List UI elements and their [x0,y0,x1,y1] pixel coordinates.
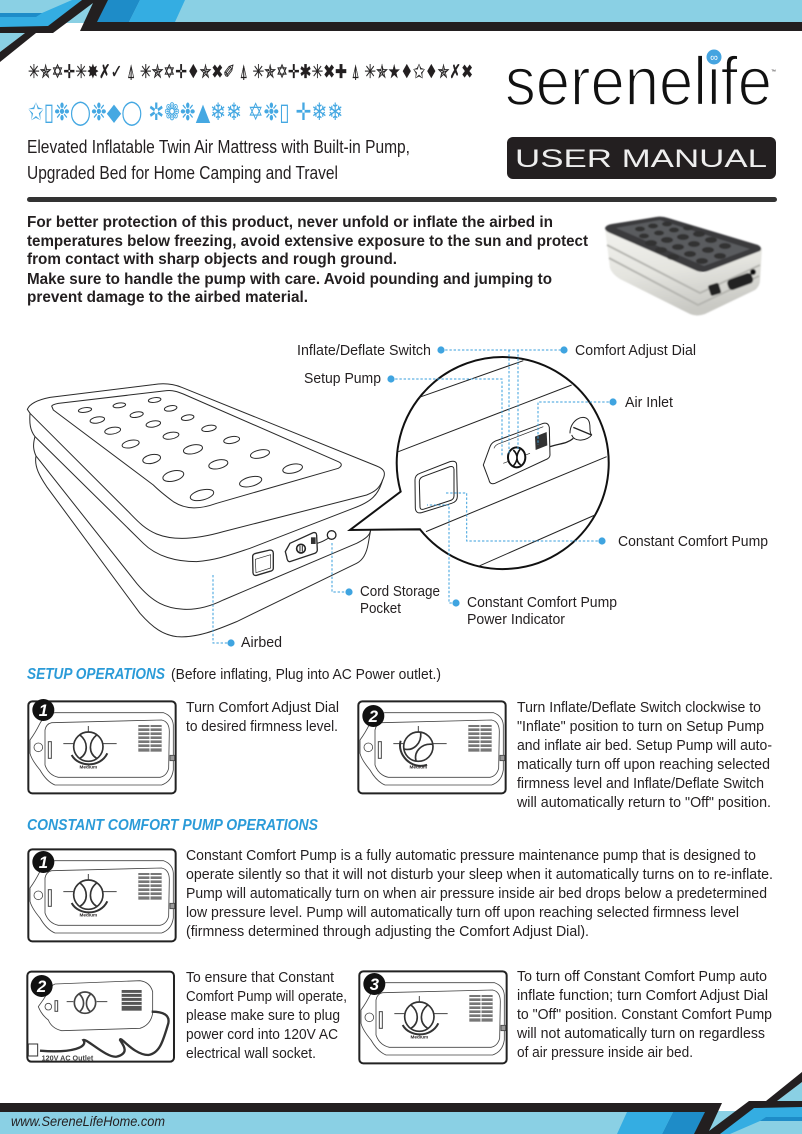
setup step 2 text [516,700,772,811]
label: Constant Comfort Pump Power Indicator [452,595,617,628]
label: Airbed: Airbed [241,635,282,651]
pump plate with power cord [28,981,169,1057]
quilted top panel [52,391,341,508]
constant step 2 image [27,972,174,1062]
airbed line drawing [27,384,384,637]
constant step 3 image [359,971,507,1063]
constant step 3 text [516,969,772,1061]
constant step 3 text: will not automatically turn on regardless [516,1026,765,1042]
heading: setup operations [27,666,441,683]
divider rule [27,197,777,202]
heading: constant comfort pump operations: CONSTANT COMFORT PUMP OPERATIONS [27,817,318,834]
label: Setup Pump: Setup Pump [304,371,381,387]
heading: setup operations: (Before inflating, Plug into AC Power outlet.) [171,667,441,683]
callout magnifier [350,357,609,569]
constant step 3 text: To turn off Constant Comfort Pump auto [517,969,767,985]
label: Cord Storage Pocket: Pocket [360,601,401,617]
label: Constant Comfort Pump Power Indicator: Constant Comfort Pump [467,595,617,611]
constant step 3 image: 3 [370,975,380,994]
callout bubble [350,357,609,569]
setup step 2 image [358,701,506,793]
constant step 2 image: 120V AC Outlet [42,1053,94,1062]
setup step 2 text: will automatically return to "Off" position. [516,795,771,811]
user manual badge: USER MANUAL [515,145,767,173]
safety warning text: temperatures below freezing, avoid extensive exposure to the sun and protect [27,233,589,250]
product subtitle: Upgraded Bed for Home Camping and Travel [27,163,338,183]
footer website: www.SereneLifeHome.com [11,1113,165,1129]
constant step 3 text: of air pressure inside air bed. [517,1045,693,1061]
base outline [36,456,371,637]
user manual badge [507,137,776,179]
constant step 2 text: power cord into 120V AC [186,1027,338,1043]
header band [0,0,802,62]
safety warning text: from contact with sharp objects and rough ground. [27,251,397,268]
safety warning text: prevent damage to the airbed material. [27,289,308,306]
constant step 1 text: Constant Comfort Pump is a fully automatic pressure maintenance pump that is designed to [186,848,756,864]
label: Cord Storage Pocket [345,584,440,617]
setup step 1 text: to desired firmness level. [186,719,338,735]
constant step 3 text: to "Off" position. Constant Comfort Pump [517,1007,772,1023]
constant step 2 image: 2 [36,977,47,996]
setup step 1 image: Medium [80,765,97,770]
coded model line: ✩▯❉◯❉◆◯ ✲❁❉▲❄❄ ✡❉▯ ✛❄❄ [28,98,343,126]
product subtitle [27,137,410,183]
heading: setup operations: SETUP OPERATIONS [27,666,165,683]
product photo: airbed [605,217,762,316]
constant step 1 image: 1 [39,853,48,872]
constant step 1 image: Medium [80,913,97,918]
label: Constant Comfort Pump: Constant Comfort Pump [618,534,768,550]
setup step 1 text: Turn Comfort Adjust Dial [186,700,339,716]
constant step 2 text: please make sure to plug [186,1008,340,1024]
footer band [0,1072,802,1134]
constant step 2 text: electrical wall socket. [186,1046,316,1062]
constant step 1 text: Pump will automatically turn on when air pressure inside air bed drops below a predetermined [186,886,767,902]
small pump panel [285,531,336,562]
constant step 2 text: To ensure that Constant [186,970,334,986]
small power button [253,550,273,575]
constant step 2 text: Comfort Pump will operate, [186,989,347,1005]
pump control panel [483,417,592,484]
label: Constant Comfort Pump Power Indicator: Power Indicator [467,612,565,628]
constant step 3 image: Medium [411,1035,428,1040]
setup step 2 text: and inflate air bed. Setup Pump will auto- [517,738,772,754]
constant step 1 text [186,848,773,940]
setup step 2 image: Medium [410,765,427,770]
constant step 3 text: inflate function; turn Comfort Adjust Dial [517,988,768,1004]
constant step 2 text [186,970,347,1062]
setup step 1 text [186,700,339,735]
constant step 1 text: (firmness determined through adjusting the Comfort Adjust Dial). [186,924,589,940]
coded title line: ✳✯✡✛✳✸✗✓ ⍋ ✳✯✡✛♦✯✖✐ ⍋ ✳✯✡✛✱✳✖✚ ⍋ ✳✯★♦✩♦✯✗✖ [28,61,473,83]
setup step 2 text: "Inflate" position to turn on Setup Pump [517,719,764,735]
setup step 2 text: firmness level and Inflate/Deflate Switch [517,776,764,792]
logo: serenelife: serenelife [505,43,772,120]
power indicator button [415,461,457,513]
setup step 2 image: 2 [368,707,379,726]
mattress dimples [78,397,303,503]
setup step 1 image: 1 [39,701,48,720]
constant step 1 image [28,849,176,941]
safety warning text [27,214,589,306]
seam lines [398,361,607,566]
middle layer [30,413,383,562]
safety warning text: For better protection of this product, never unfold or inflate the airbed in [27,214,553,231]
logo: serenelife: ∞ [710,52,718,64]
label: Comfort Adjust Dial: Comfort Adjust Dial [575,343,696,359]
lower layer [34,437,371,609]
setup step 1 image [28,699,176,793]
safety warning text: Make sure to handle the pump with care. Avoid pounding and jumping to [27,271,552,288]
label: Inflate/Deflate Switch: Inflate/Deflate Switch [297,343,431,359]
setup step 2 text: matically turn off upon reaching selected [517,757,770,773]
product subtitle: Elevated Inflatable Twin Air Mattress with Built-in Pump, [27,137,410,157]
leader lines [213,350,613,643]
label: Cord Storage Pocket: Cord Storage [360,584,440,600]
label: Air Inlet: Air Inlet [625,395,673,411]
setup step 2 text: Turn Inflate/Deflate Switch clockwise to [517,700,761,716]
constant step 1 text: operate silently so that it will not disturb your sleep when it automatically turns on to re-inflate. [186,867,773,883]
logo: serenelife: ™ [771,69,776,75]
top pillow outline [27,384,384,538]
constant step 1 text: low pressure level. Pump will automatically turn off upon reaching selected firmness level [186,905,739,921]
